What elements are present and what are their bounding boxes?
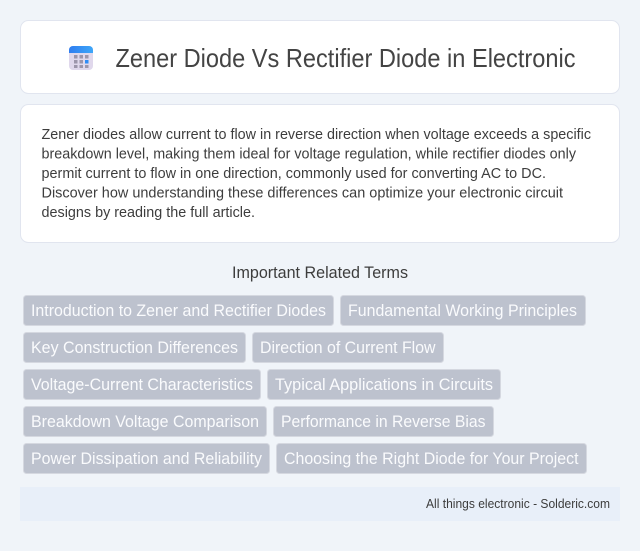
tag: applications bbox=[268, 370, 500, 400]
tag: reverse bias: Performance in Reverse Bias bbox=[281, 412, 486, 431]
heading: important related terms: Important Related Terms bbox=[232, 264, 408, 282]
text block: description: designs by reading the full article. bbox=[42, 204, 255, 221]
tag: construction bbox=[24, 332, 246, 362]
panel: related term tags bbox=[24, 296, 586, 474]
tag: power dissipation bbox=[24, 444, 270, 474]
tag: power dissipation: Power Dissipation and Reliability bbox=[31, 449, 263, 468]
text block: description: Discover how understanding these differences can optimize your electronic circuit bbox=[42, 184, 564, 202]
tag: introduction: Introduction to Zener and Rectifier Diodes bbox=[31, 301, 326, 320]
footer text: All things electronic - Solderic.com bbox=[426, 497, 610, 511]
tag: construction: Key Construction Differences bbox=[31, 338, 238, 357]
panel: header card bbox=[20, 20, 620, 94]
tag: choosing diode: Choosing the Right Diode for Your Project bbox=[284, 449, 579, 468]
title: Zener Diode Vs Rectifier Diode in Electronic bbox=[116, 45, 576, 73]
tag: working principles: Fundamental Working Principles bbox=[348, 301, 577, 320]
icon: calendar bbox=[69, 46, 93, 70]
tag: current flow: Direction of Current Flow bbox=[260, 338, 436, 357]
panel: description card bbox=[20, 104, 620, 242]
text block: description: breakdown level, making them ideal for voltage regulation, while rectifier diodes only bbox=[42, 146, 576, 162]
tag: working principles bbox=[340, 296, 586, 326]
tag: voltage-current: Voltage-Current Characteristics bbox=[31, 375, 253, 394]
tag: breakdown voltage: Breakdown Voltage Comparison bbox=[31, 412, 259, 431]
tag: voltage-current bbox=[24, 370, 260, 400]
tag: reverse bias bbox=[274, 406, 494, 436]
footer bar bbox=[20, 487, 620, 521]
tag: choosing diode bbox=[276, 444, 586, 474]
tag: applications: Typical Applications in Circuits bbox=[275, 375, 493, 394]
text block: description bbox=[42, 126, 591, 221]
text block: description: permit current to flow in one direction, commonly used for converting AC to DC. bbox=[42, 165, 546, 182]
tag: introduction bbox=[24, 296, 334, 326]
tag: current flow bbox=[252, 332, 444, 362]
tag: breakdown voltage bbox=[24, 406, 266, 436]
text block: description: Zener diodes allow current to flow in reverse direction when voltage exceeds a specific bbox=[42, 126, 591, 143]
